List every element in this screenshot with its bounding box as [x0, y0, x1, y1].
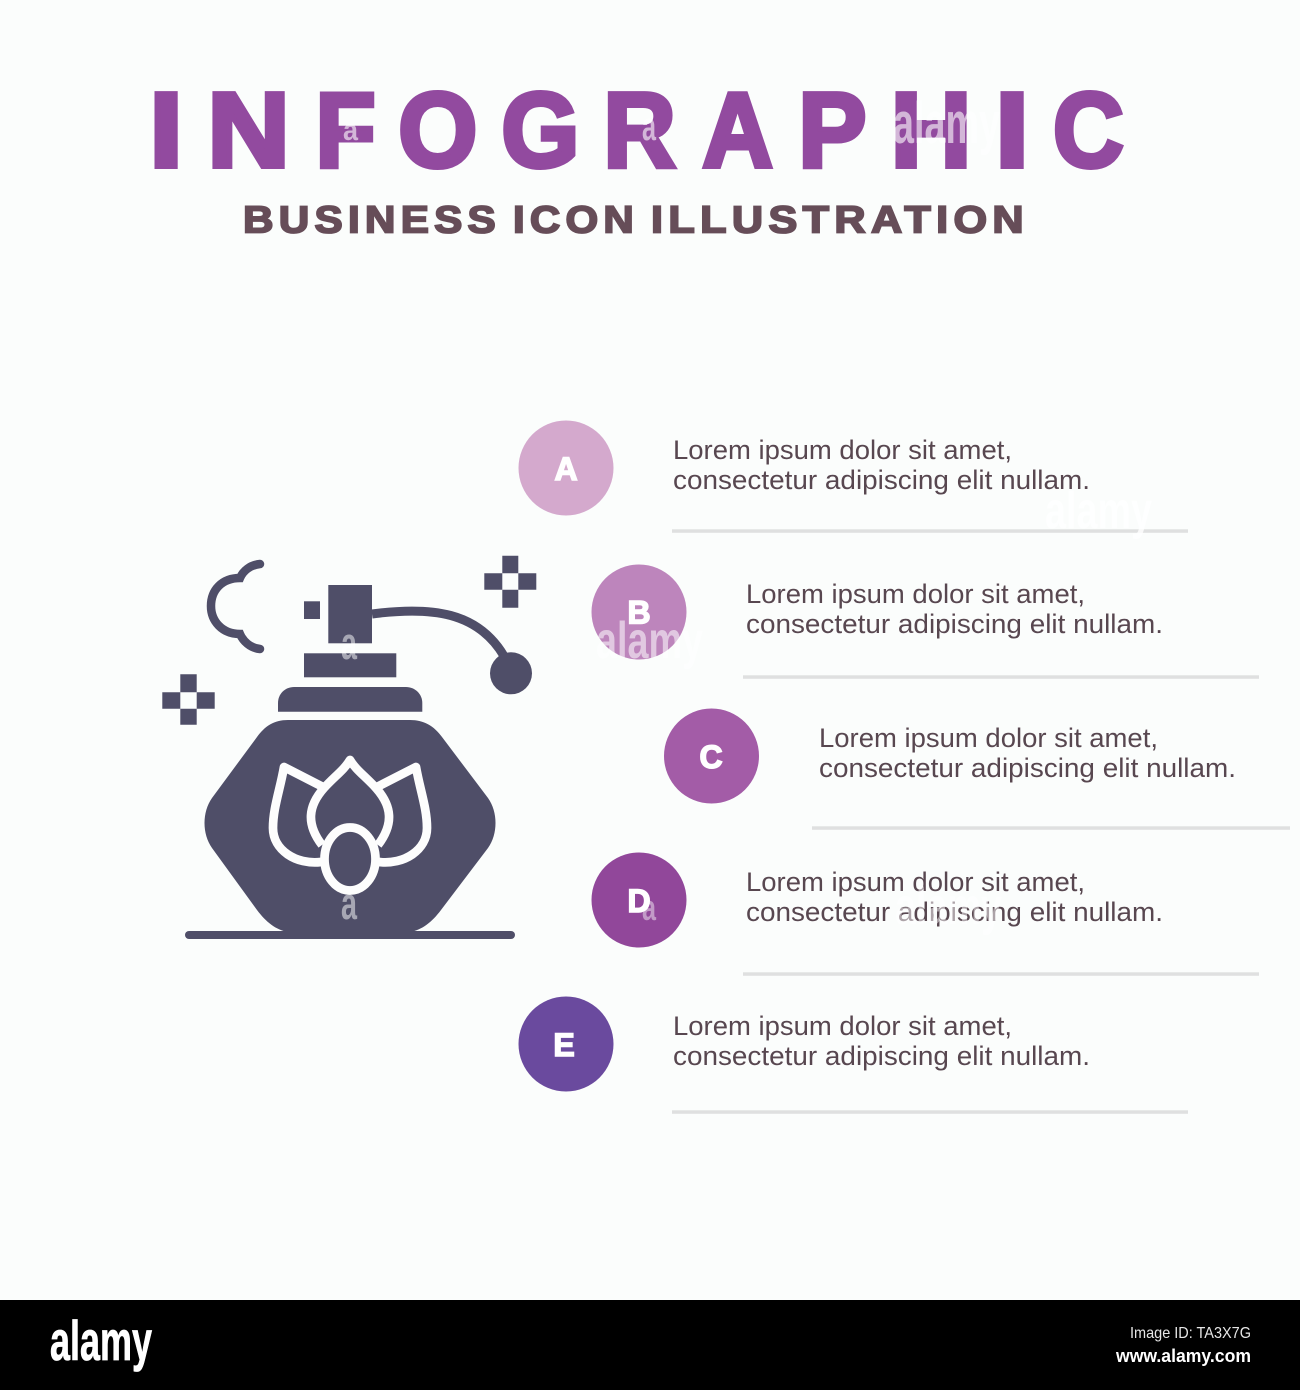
title watermark: a: [343, 114, 358, 147]
step A: [518, 420, 1188, 533]
step D badge: [592, 852, 686, 948]
watermark letters on icon: a: [341, 878, 358, 929]
step D text: [746, 867, 1163, 927]
footer bar: [0, 1300, 1300, 1390]
watermark letters on icon: [341, 618, 358, 929]
title: N: [208, 72, 290, 190]
subtitle: ICON: [513, 200, 639, 242]
subtitle: [243, 200, 1029, 242]
title: A: [702, 72, 773, 190]
title: [149, 72, 1124, 190]
subtitle: ILLUSTRATION: [651, 200, 1029, 242]
step C letter: C: [699, 739, 723, 775]
step A text: consectetur adipiscing elit nullam.: [673, 465, 1090, 495]
title: R: [604, 72, 676, 190]
step C text: [819, 723, 1236, 783]
step C text: consectetur adipiscing elit nullam.: [819, 753, 1236, 783]
icon: sparkle left: [162, 674, 215, 725]
step B badge: [592, 564, 686, 660]
step C: [664, 708, 1290, 830]
step E: [518, 996, 1188, 1114]
alamy watermarks: alamy: [895, 878, 1002, 936]
alamy watermarks: alamy: [1045, 482, 1152, 540]
icon: collar: [304, 653, 396, 677]
title: F: [316, 72, 376, 190]
icon: spray dot: [304, 601, 320, 619]
watermark letters on icon: a: [341, 618, 358, 669]
icon: perfume bottle: [162, 556, 536, 939]
step D text: Lorem ipsum dolor sit amet,: [746, 867, 1085, 897]
step E badge: [518, 996, 614, 1092]
step B text: consectetur adipiscing elit nullam.: [746, 609, 1163, 639]
step C text: Lorem ipsum dolor sit amet,: [819, 723, 1158, 753]
icon: sparkle right: [484, 556, 536, 608]
title watermark: a: [642, 105, 656, 149]
title watermark: alamy: [893, 91, 1000, 156]
alamy watermarks: [596, 482, 1152, 936]
title: C: [1053, 72, 1124, 190]
step E text: Lorem ipsum dolor sit amet,: [673, 1011, 1012, 1041]
step E letter: E: [553, 1027, 575, 1063]
step D letter: D: [627, 883, 651, 919]
step E text: consectetur adipiscing elit nullam.: [673, 1041, 1090, 1071]
footer url: www.alamy.com: [1115, 1346, 1251, 1366]
icon: spray bulb: [490, 652, 532, 694]
icon: bottle body: [204, 720, 496, 932]
icon: lotus flower: [273, 760, 427, 890]
title: G: [502, 72, 579, 190]
step B text: [746, 579, 1163, 639]
alamy watermarks: a: [642, 887, 657, 928]
footer image id: Image ID: TA3X7G: [1130, 1325, 1251, 1342]
icon: scent cloud: [211, 564, 260, 649]
step A letter: A: [554, 451, 578, 487]
title: P: [798, 72, 866, 190]
title watermark: [343, 91, 1000, 156]
step A badge: [518, 420, 614, 516]
title: I: [149, 72, 183, 190]
alamy watermarks: alamy: [596, 612, 703, 670]
icon: base line: [185, 931, 515, 939]
title: O: [398, 72, 477, 190]
step E text: [673, 1011, 1090, 1071]
step D text: consectetur adipiscing elit nullam.: [746, 897, 1163, 927]
step D: [592, 852, 1259, 976]
step B: [592, 564, 1259, 679]
step B text: Lorem ipsum dolor sit amet,: [746, 579, 1085, 609]
step B letter: B: [627, 594, 651, 630]
title: I: [995, 72, 1029, 190]
step A text: Lorem ipsum dolor sit amet,: [673, 435, 1012, 465]
footer logo: alamy: [50, 1309, 152, 1372]
step A text: [673, 435, 1090, 495]
title: H: [891, 72, 972, 190]
icon: spray tube: [372, 611, 504, 656]
icon: perfume cap: [328, 585, 372, 643]
icon: shoulder: [278, 687, 422, 712]
step C badge: [664, 708, 759, 804]
subtitle: BUSINESS: [243, 200, 501, 242]
